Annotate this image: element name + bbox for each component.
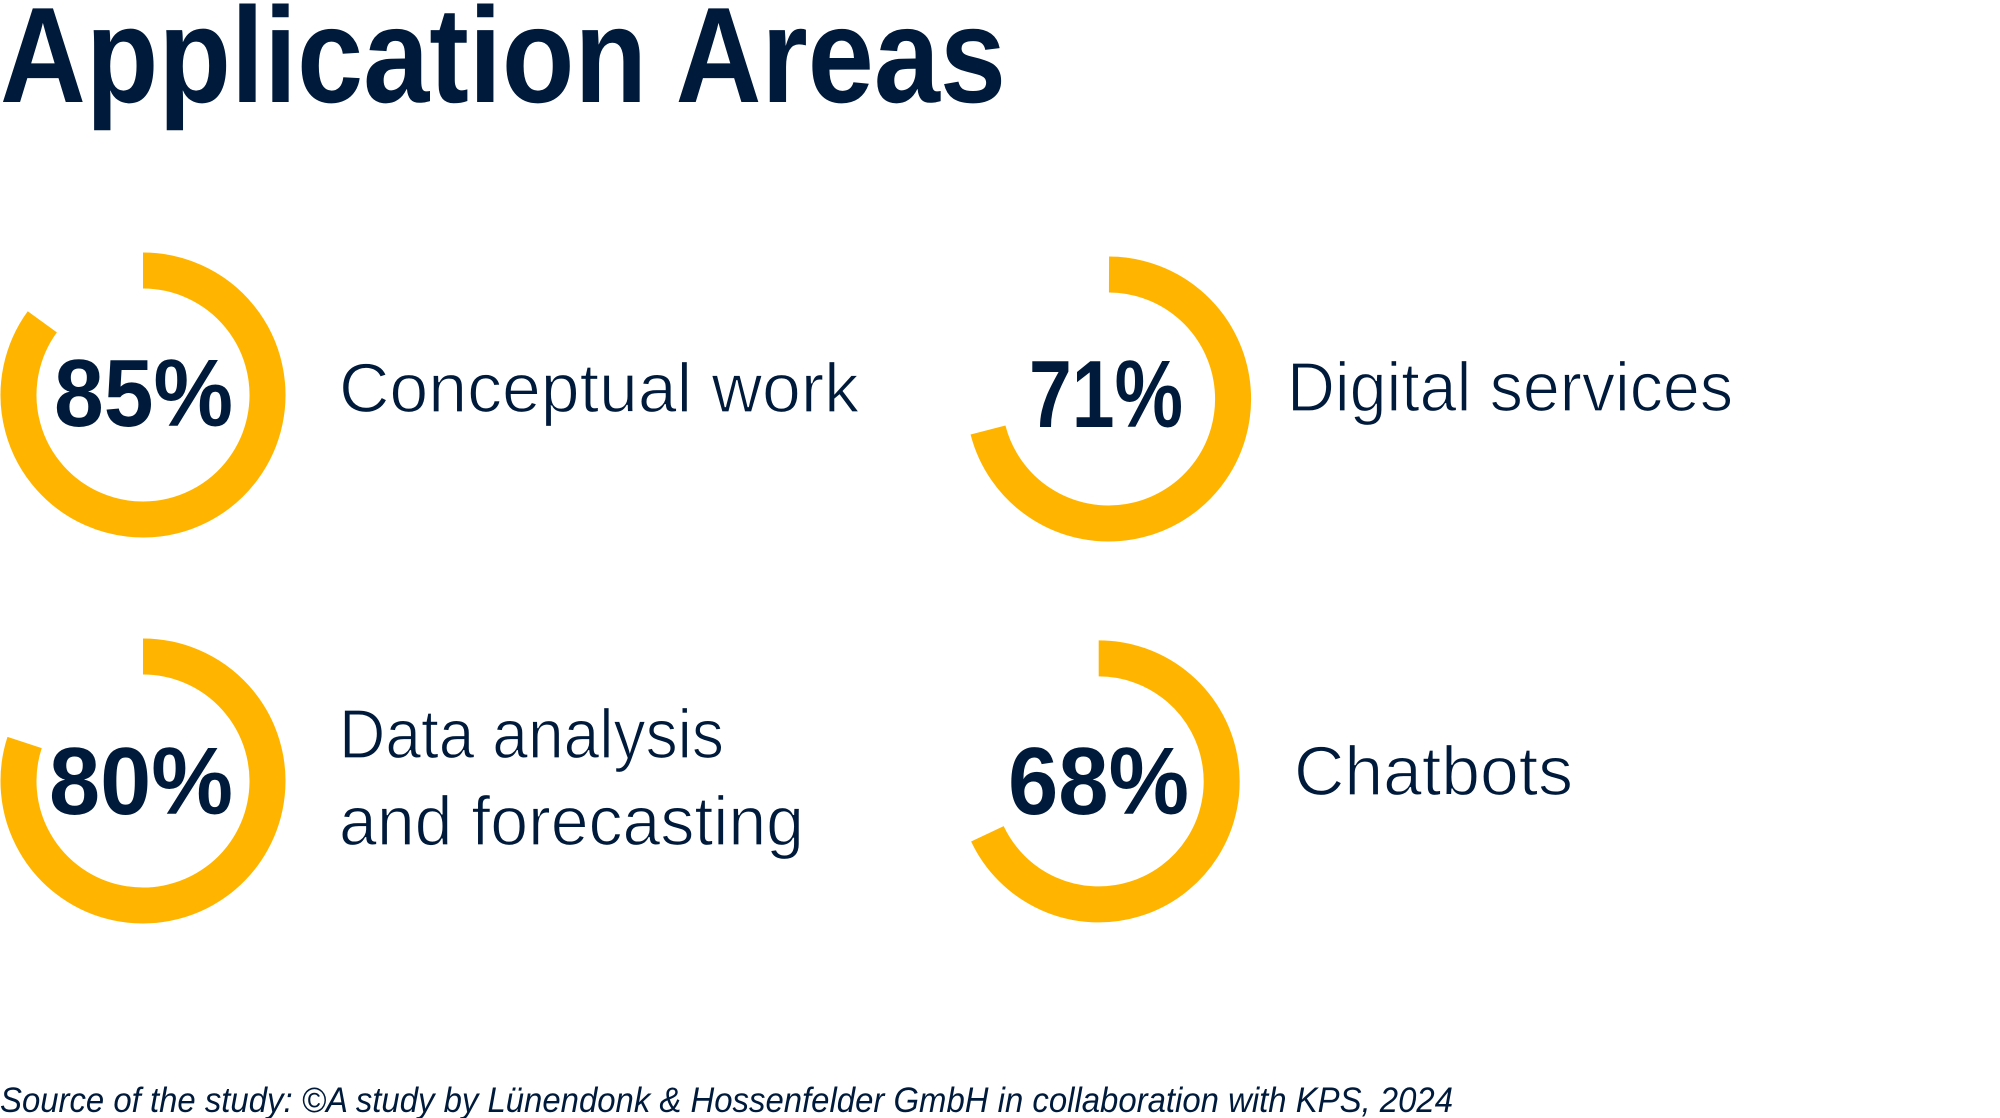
label: data analysis and forecasting — [339, 695, 804, 860]
label: data analysis and forecasting: Data analysis — [339, 695, 724, 773]
label: chatbots: Chatbots — [1294, 732, 1573, 810]
value: 80%: 80% — [49, 728, 233, 835]
panel: data analysis and forecasting — [18, 656, 804, 906]
donut chart: 71% — [988, 274, 1233, 523]
label: conceptual work: Conceptual work — [339, 349, 860, 427]
value: 85%: 85% — [54, 340, 233, 447]
panel: conceptual work — [19, 270, 860, 519]
value: 71%: 71% — [1029, 341, 1183, 448]
label: digital services: Digital services — [1287, 348, 1733, 426]
label: data analysis and forecasting: and forecasting — [339, 782, 804, 860]
panel: digital services — [988, 274, 1733, 523]
panel: chatbots — [987, 658, 1573, 904]
donut chart: 85% — [19, 270, 268, 519]
value: 68%: 68% — [1008, 728, 1189, 835]
donut chart: 80% — [18, 656, 267, 906]
donut chart: 68% — [987, 658, 1222, 904]
